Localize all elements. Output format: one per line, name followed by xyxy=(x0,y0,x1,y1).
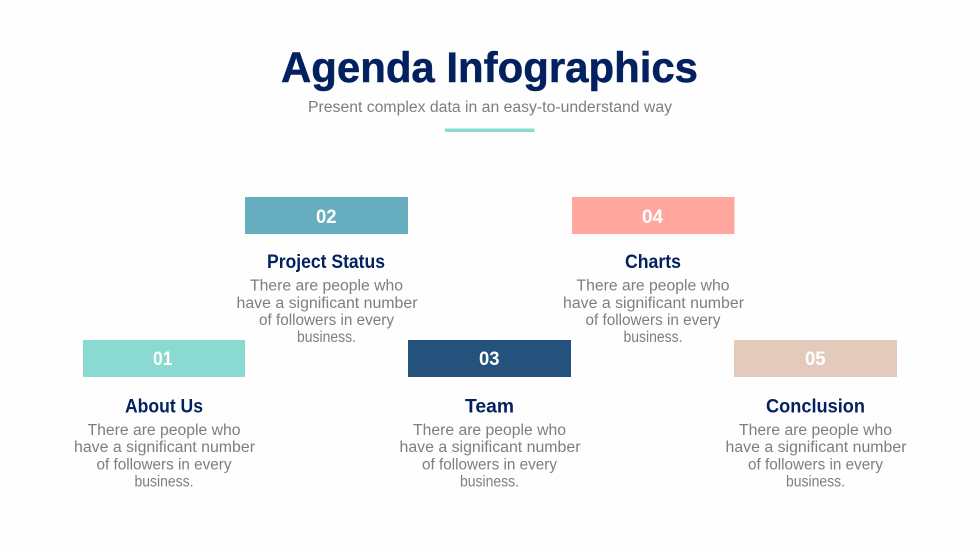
body text xyxy=(74,422,255,490)
body text: of followers in every xyxy=(422,456,557,474)
body text: business. xyxy=(624,329,682,346)
panel: 04 Charts xyxy=(563,197,744,346)
panel: 01 About Us xyxy=(74,340,255,490)
body text: business. xyxy=(134,474,194,490)
body text xyxy=(400,422,580,490)
number box 01: 01 xyxy=(153,349,173,370)
body text: There are people who xyxy=(739,422,892,439)
body text: business. xyxy=(786,474,845,490)
body text xyxy=(236,278,418,346)
title underline xyxy=(445,128,534,132)
panel: 03 Team xyxy=(400,340,580,490)
body text: There are people who xyxy=(88,422,240,439)
heading: About Us: About Us xyxy=(125,396,203,418)
number box 01 xyxy=(83,340,245,377)
number box 05 xyxy=(734,340,897,377)
number box 05: 05 xyxy=(805,349,826,370)
panel: 05 Conclusion xyxy=(726,340,906,490)
body text xyxy=(726,422,906,490)
number box 02 xyxy=(245,197,408,234)
body text: have a significant number xyxy=(563,295,744,312)
number box 03: 03 xyxy=(479,349,500,370)
panel: 02 Project Status xyxy=(236,197,418,346)
body text: of followers in every xyxy=(748,456,883,474)
body text: have a significant number xyxy=(400,439,580,456)
number box 02: 02 xyxy=(316,207,336,228)
body text: business. xyxy=(460,474,519,490)
body text: There are people who xyxy=(413,422,566,439)
title: Agenda Infographics xyxy=(281,44,698,92)
body text: of followers in every xyxy=(96,456,232,474)
body text: have a significant number xyxy=(74,439,255,456)
body text: have a significant number xyxy=(726,439,906,456)
number box 03 xyxy=(408,340,571,377)
body text: have a significant number xyxy=(236,295,418,312)
heading: Charts: Charts xyxy=(625,251,681,273)
body text: of followers in every xyxy=(586,312,721,329)
heading: Conclusion: Conclusion xyxy=(766,396,865,418)
body text: There are people who xyxy=(250,278,403,294)
body text: of followers in every xyxy=(259,312,394,329)
number box 04 xyxy=(572,197,734,234)
body text xyxy=(563,278,744,346)
heading: Project Status: Project Status xyxy=(267,251,385,273)
number box 04: 04 xyxy=(642,207,663,228)
heading: Team: Team xyxy=(465,396,514,418)
body text: There are people who xyxy=(576,278,730,294)
subtitle: Present complex data in an easy-to-understand way xyxy=(308,99,672,116)
body text: business. xyxy=(297,329,356,346)
